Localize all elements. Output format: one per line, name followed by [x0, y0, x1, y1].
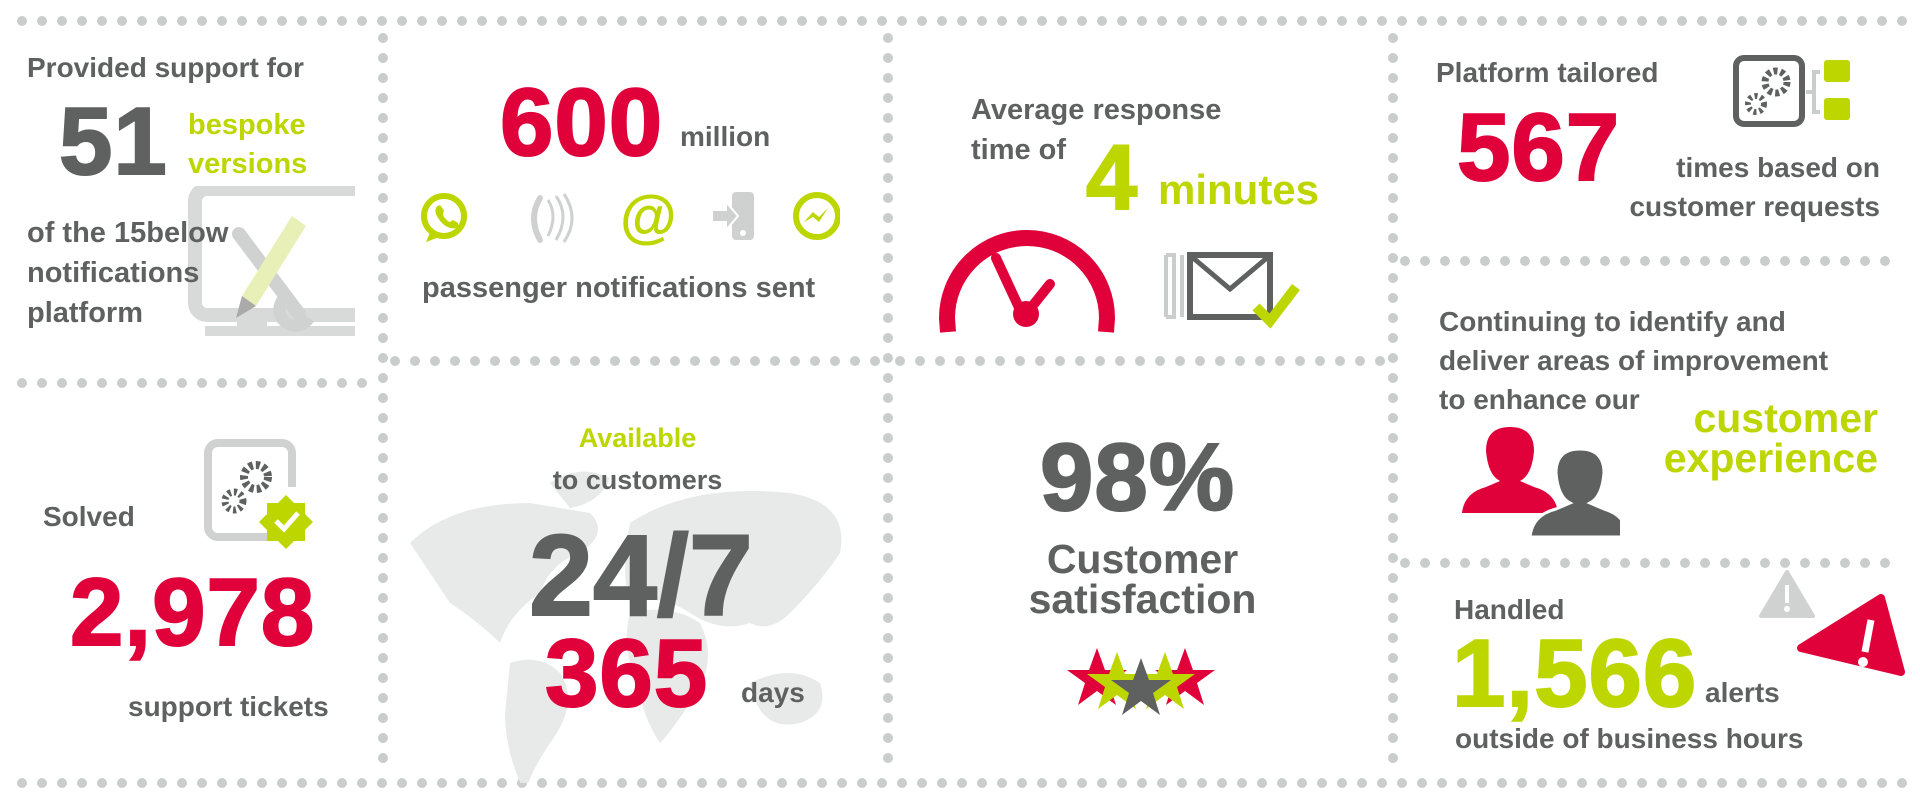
text: platform tailored: Platform tailored: [1436, 57, 1658, 88]
icon: two people: [1462, 427, 1620, 536]
text: bespoke versions: versions: [188, 148, 307, 180]
number: 2,978: 2,978: [70, 559, 315, 666]
icon: gears box: [1733, 55, 1850, 127]
text: average response time of: time of: [971, 134, 1066, 166]
text: continuing to identify: [1439, 306, 1828, 415]
icon: envelope with check: [1164, 252, 1300, 328]
number: 1,566: 1,566: [1452, 620, 1697, 727]
icon: gauge clock: [939, 230, 1115, 333]
text: continuing to identify: to enhance our: [1439, 384, 1640, 415]
text: available to customers: Available: [579, 423, 696, 453]
number: 4: 4: [1086, 127, 1137, 229]
text: customer satisfaction: [1029, 536, 1256, 622]
text: provided support for: Provided support for: [27, 52, 304, 83]
text: support tickets: support tickets: [128, 691, 329, 722]
number: 365: 365: [545, 620, 708, 727]
panel: customer experience: [1439, 306, 1878, 536]
text: times based on customer requests: times based on: [1676, 152, 1880, 183]
text: of the 15below notifications platform: of the 15below: [27, 217, 228, 249]
icons: channels: [421, 188, 840, 248]
text: days: days: [741, 677, 805, 708]
panel: satisfaction: [1029, 424, 1256, 715]
text: times based on customer requests: customer requests: [1629, 191, 1880, 222]
panel: bespoke versions: [27, 52, 355, 336]
panel: passenger notifications: [421, 69, 840, 304]
number: 24/7: 24/7: [529, 512, 753, 640]
icon: warning triangles: [1759, 570, 1905, 676]
panel: platform tailored: [1436, 55, 1880, 222]
text: of the 15below notifications platform: notifications: [27, 257, 199, 289]
number: 567: 567: [1457, 94, 1620, 201]
text: minutes: minutes: [1158, 166, 1319, 213]
text: outside of business hours: outside of business hours: [1455, 723, 1803, 754]
icon: world map: [410, 472, 842, 783]
text: solved: Solved: [43, 501, 135, 532]
panel: solved tickets: [43, 439, 329, 722]
text: passenger notifications sent: passenger notifications sent: [422, 272, 815, 304]
text: of the 15below notifications platform: platform: [27, 297, 143, 329]
text: handled: Handled: [1454, 594, 1564, 625]
text: customer satisfaction: satisfaction: [1029, 576, 1256, 622]
text: customer experience: experience: [1664, 435, 1878, 481]
number: 51: 51: [59, 88, 168, 195]
text: million: million: [680, 121, 770, 152]
number: 600: 600: [500, 69, 663, 176]
text: available to customers: [553, 423, 722, 495]
number: 98%: 98%: [1040, 424, 1235, 531]
text: continuing to identify: deliver areas of improvement: [1439, 345, 1828, 376]
text: available to customers: to customers: [553, 465, 722, 495]
text: times based on customer requests: [1629, 152, 1880, 222]
text: alerts: alerts: [1705, 677, 1780, 708]
panel: alerts: [1452, 570, 1905, 754]
icon: gears box with badge: [204, 439, 313, 549]
icon: monitor with tools: [188, 186, 355, 336]
text: customer experience: customer: [1693, 395, 1878, 441]
text: customer experience: [1664, 395, 1878, 481]
panel: response time: [939, 94, 1319, 333]
text: bespoke versions: bespoke: [188, 109, 306, 141]
panel: availability: [410, 423, 842, 783]
icon: stars: [1067, 648, 1215, 715]
text: continuing to identify: Continuing to identify and: [1439, 306, 1786, 337]
text: customer satisfaction: Customer: [1047, 536, 1238, 582]
text: average response time of: [971, 94, 1221, 166]
text: average response time of: Average response: [971, 94, 1221, 126]
text: bespoke versions: [188, 109, 307, 180]
text: of the 15below notifications platform: [27, 217, 228, 329]
